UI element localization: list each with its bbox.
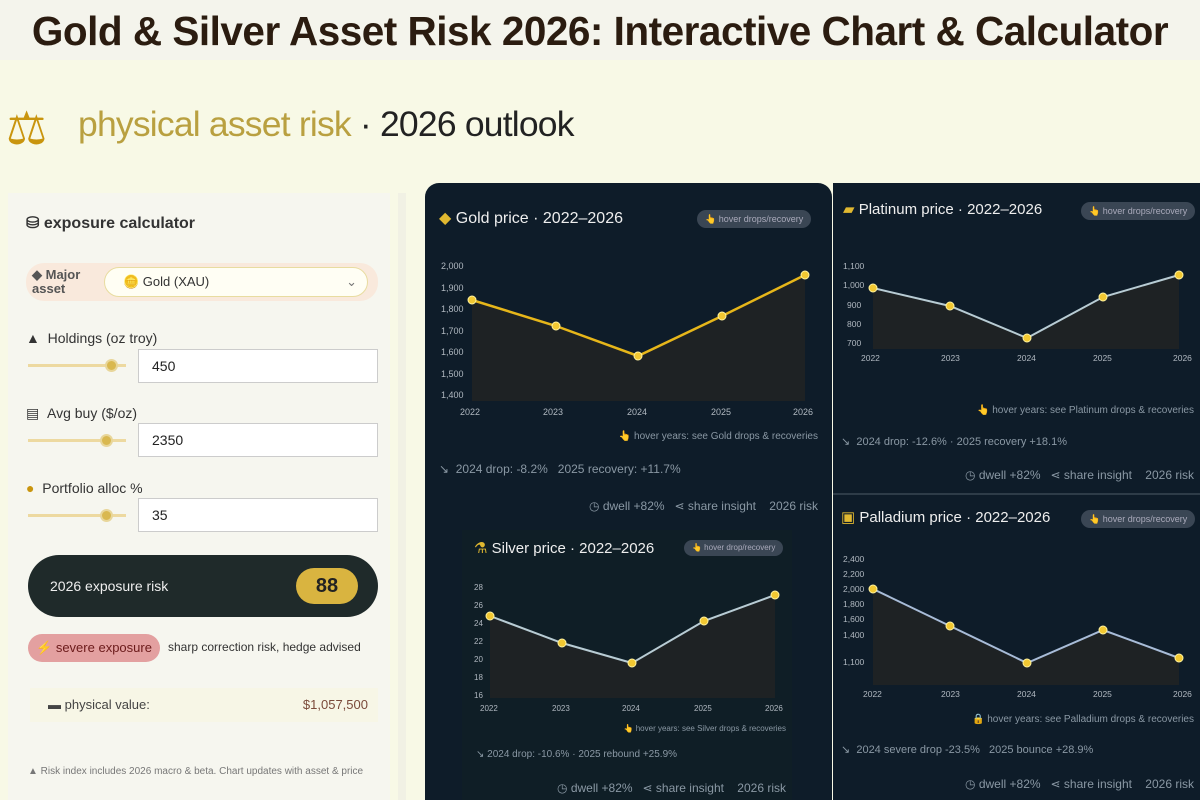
palladium stats: ↘ 2024 severe drop -23.5% 2025 bounce +28.9%	[841, 744, 1093, 756]
palladium pill: 👆 hover drops/recovery	[1089, 514, 1187, 524]
asset selector: ◆ Major	[32, 267, 80, 282]
gold stats: ↘ 2024 drop: -8.2% 2025 recovery: +11.7%	[439, 462, 681, 476]
silver line chart: 18	[474, 673, 483, 682]
gold line chart: 2022	[460, 407, 480, 417]
gold line chart: 2026	[793, 407, 813, 417]
asset selector: asset	[32, 281, 65, 296]
input: holdings	[26, 330, 378, 383]
panel: gold chart	[425, 183, 832, 800]
platinum line chart	[843, 261, 1192, 363]
platinum line chart: 1,000	[843, 280, 865, 290]
silver pill	[684, 540, 783, 556]
icon: scales: ⚖	[6, 102, 47, 154]
gold hint: 👆 hover years: see Gold drops & recoveries	[619, 431, 818, 442]
palladium pill	[1081, 510, 1195, 528]
risk score bar	[28, 555, 378, 617]
panel: exposure calculator	[8, 193, 390, 800]
input: portfolio alloc	[26, 480, 378, 532]
gold line chart: 1,500	[441, 369, 464, 379]
palladium line chart: 2026	[1173, 689, 1192, 699]
palladium line chart: 2,200	[843, 569, 865, 579]
palladium line chart: 2023	[941, 689, 960, 699]
platinum footer: ◷ dwell +82% ⋖ share insight 2026 risk	[965, 468, 1194, 482]
silver line chart: 2025	[694, 704, 712, 713]
gold line chart: 1,700	[441, 326, 464, 336]
gold line chart: 1,400	[441, 390, 464, 400]
platinum line chart: 2023	[941, 353, 960, 363]
physical value	[30, 688, 378, 722]
asset selector: 🪙 Gold (XAU)	[123, 274, 209, 289]
palladium line chart: 2024	[1017, 689, 1036, 699]
palladium line chart	[843, 554, 1192, 699]
gold line chart: 1,800	[441, 304, 464, 314]
subtitle: physical asset risk · 2026 outlook	[78, 104, 574, 144]
gold line chart: 2025	[711, 407, 731, 417]
silver line chart: 2022	[480, 704, 498, 713]
palladium line chart: 1,600	[843, 614, 865, 624]
input: holdings: 450	[152, 358, 175, 374]
silver pill: 👆 hover drop/recovery	[692, 543, 775, 552]
silver hint: 👆 hover years: see Silver drops & recoveries	[624, 724, 786, 733]
palladium line chart: 1,400	[843, 630, 865, 640]
score badge	[296, 568, 358, 604]
silver line chart: 2026	[765, 704, 783, 713]
silver line chart: 24	[474, 619, 483, 628]
title: Gold & Silver Asset Risk 2026: Interactive Chart & Calculator	[32, 8, 1168, 54]
heading: calculator: ⛁ exposure calculator	[26, 215, 195, 232]
gold footer: ◷ dwell +82% ⋖ share insight 2026 risk	[589, 499, 818, 513]
input: avg buy	[26, 405, 378, 457]
panel: platinum chart	[833, 183, 1200, 493]
silver stats: ↘ 2024 drop: -10.6% · 2025 rebound +25.9%	[476, 749, 677, 760]
platinum pill	[1081, 202, 1195, 220]
palladium line chart: 2,400	[843, 554, 865, 564]
silver line chart: 2024	[622, 704, 640, 713]
asset selector	[26, 263, 378, 301]
input: avg buy: 2350	[152, 432, 183, 448]
panel: palladium chart	[833, 495, 1200, 800]
platinum line chart: 2024	[1017, 353, 1036, 363]
palladium footer: ◷ dwell +82% ⋖ share insight 2026 risk	[965, 777, 1194, 791]
silver line chart: 28	[474, 583, 483, 592]
risk score bar: 2026 exposure risk	[50, 578, 168, 594]
platinum title: ▰ Platinum price · 2022–2026	[843, 201, 1042, 218]
physical value: ▬ physical value:	[48, 697, 150, 712]
silver title: ⚗ Silver price · 2022–2026	[474, 540, 654, 557]
panel: silver chart	[462, 530, 792, 800]
gold line chart: 2,000	[441, 261, 464, 271]
palladium line chart: 2025	[1093, 689, 1112, 699]
silver line chart: 26	[474, 601, 483, 610]
gold line chart: 1,600	[441, 347, 464, 357]
platinum line chart: 2025	[1093, 353, 1112, 363]
input: avg buy: ▤ Avg buy ($/oz)	[26, 405, 137, 421]
severity badge: sharp correction risk, hedge advised	[168, 640, 361, 654]
footnote: ▲ Risk index includes 2026 macro & beta. Chart updates with asset & price	[28, 766, 363, 777]
gold line chart	[441, 261, 813, 417]
input: portfolio alloc: 35	[152, 507, 168, 523]
palladium line chart: 1,100	[843, 657, 865, 667]
platinum line chart: 800	[847, 319, 861, 329]
silver line chart: 22	[474, 637, 483, 646]
severity badge: ⚡ severe exposure	[36, 640, 152, 655]
gold line chart: 1,900	[441, 283, 464, 293]
asset selector: ⌄	[346, 274, 357, 289]
platinum line chart: 700	[847, 338, 861, 348]
gold pill: 👆 hover drops/recovery	[705, 214, 803, 224]
silver line chart: 20	[474, 655, 483, 664]
platinum line chart: 2022	[861, 353, 880, 363]
input: portfolio alloc: ● Portfolio alloc %	[26, 480, 143, 496]
severity badge	[28, 634, 361, 662]
gold pill	[697, 210, 811, 228]
silver footer: ◷ dwell +82% ⋖ share insight 2026 risk	[557, 781, 786, 795]
gold title: ◆ Gold price · 2022–2026	[439, 210, 623, 227]
palladium title: ▣ Palladium price · 2022–2026	[841, 509, 1050, 526]
platinum line chart: 2026	[1173, 353, 1192, 363]
gold line chart: 2024	[627, 407, 647, 417]
palladium line chart: 2,000	[843, 584, 865, 594]
silver line chart	[474, 583, 783, 713]
platinum hint: 👆 hover years: see Platinum drops & recoveries	[977, 405, 1194, 416]
gold line chart: 2023	[543, 407, 563, 417]
platinum pill: 👆 hover drops/recovery	[1089, 206, 1187, 216]
silver line chart: 16	[474, 691, 483, 700]
palladium hint: 🔒 hover years: see Palladium drops & recoveries	[972, 714, 1194, 725]
platinum stats: ↘ 2024 drop: -12.6% · 2025 recovery +18.1%	[841, 436, 1067, 448]
platinum line chart: 900	[847, 300, 861, 310]
palladium line chart: 2022	[863, 689, 882, 699]
input: holdings: ▲ Holdings (oz troy)	[26, 330, 157, 346]
palladium line chart: 1,800	[843, 599, 865, 609]
score badge: 88	[316, 575, 338, 597]
physical value: $1,057,500	[303, 697, 368, 712]
silver line chart: 2023	[552, 704, 570, 713]
platinum line chart: 1,100	[843, 261, 865, 271]
